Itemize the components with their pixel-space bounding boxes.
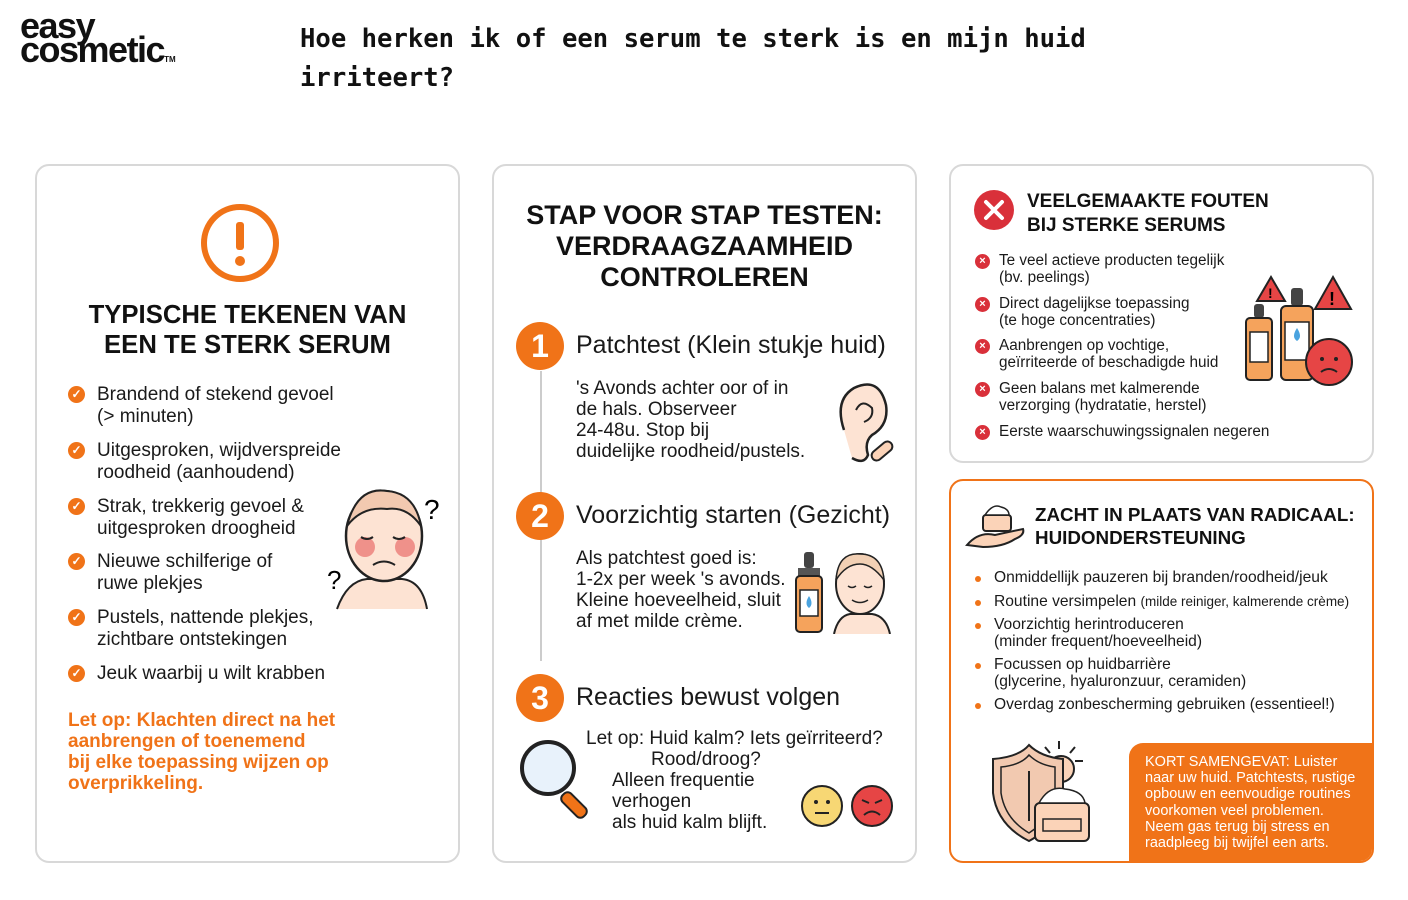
step 3: als huid kalm blijft.: [612, 812, 767, 833]
step 3: [516, 674, 893, 833]
step 2: 1-2x per week 's avonds.: [576, 569, 786, 590]
icon: emoji faces: [801, 785, 893, 827]
list: (te hoge concentraties): [999, 312, 1155, 329]
list: Routine versimpelen (milde reiniger, kalmerende crème): [994, 593, 1349, 610]
warning note: overprikkeling.: [68, 773, 203, 794]
list: [68, 384, 341, 684]
list: Overdag zonbescherming gebruiken (essentieel!): [994, 696, 1335, 713]
icon: irritated face: [327, 489, 440, 610]
list: (bv. peelings): [999, 269, 1090, 286]
logo: [20, 5, 176, 70]
summary callout: raadpleeg bij twijfel een arts.: [1145, 835, 1329, 851]
heading: VEELGEMAAKTE FOUTEN: [1027, 191, 1269, 212]
step 1: duidelijke roodheid/pustels.: [576, 441, 805, 462]
icon: bottles with warnings: !: [1268, 285, 1273, 301]
icon: red X: [974, 190, 1014, 230]
icon: hand with cream: [965, 505, 1024, 548]
heading: ZACHT IN PLAATS VAN RADICAAL:: [1035, 504, 1355, 525]
list: Voorzichtig herintroduceren: [994, 616, 1184, 633]
step 1: de hals. Observeer: [576, 399, 737, 420]
icon: ear: [839, 383, 894, 462]
panel: typical signs: [35, 164, 460, 863]
list: Strak, trekkerig gevoel &: [97, 496, 304, 517]
step 1: [516, 322, 894, 462]
list: Nieuwe schilferige of: [97, 551, 272, 572]
step 2: 2: [531, 498, 549, 534]
heading: TYPISCHE TEKENEN VAN: [89, 301, 406, 329]
step 3: Rood/droog?: [651, 749, 761, 770]
list: Eerste waarschuwingssignalen negeren: [999, 423, 1269, 440]
step 2: af met milde crème.: [576, 611, 743, 632]
step 3: Alleen frequentie: [612, 770, 755, 791]
list: Uitgesproken, wijdverspreide: [97, 440, 341, 461]
list: Onmiddellijk pauzeren bij branden/roodheid/jeuk: [994, 569, 1328, 586]
list: ruwe plekjes: [97, 573, 203, 594]
heading: [1027, 191, 1269, 236]
heading: [88, 301, 406, 359]
list: (glycerine, hyaluronzuur, ceramiden): [994, 673, 1246, 690]
title: [300, 24, 1086, 93]
list: Te veel actieve producten tegelijk: [999, 252, 1224, 269]
heading: [526, 200, 883, 292]
list: verzorging (hydratatie, herstel): [999, 397, 1206, 414]
icon: magnifier: [520, 740, 588, 819]
summary callout: KORT SAMENGEVAT: Luister: [1145, 754, 1337, 770]
step 1: Patchtest (Klein stukje huid): [576, 331, 886, 359]
warning note: [68, 710, 335, 794]
panel: common mistakes: [949, 164, 1374, 463]
step 2: Kleine hoeveelheid, sluit: [576, 590, 781, 611]
warning note: aanbrengen of toenemend: [68, 731, 306, 752]
summary callout: opbouw en eenvoudige routines: [1145, 786, 1351, 802]
panel: common mistakes: ×: [979, 383, 986, 395]
panel: gentle support: [949, 479, 1374, 863]
summary callout: Neem gas terug bij stress en: [1145, 819, 1330, 835]
list: zichtbare ontstekingen: [97, 629, 287, 650]
panel: common mistakes: ×: [979, 298, 986, 310]
list: uitgesproken droogheid: [97, 518, 296, 539]
panel: common mistakes: ×: [979, 255, 986, 267]
icon: bottles with warnings: [1245, 275, 1353, 386]
heading: CONTROLEREN: [600, 262, 809, 292]
summary callout: [1129, 743, 1379, 873]
list: Focussen op huidbarrière: [994, 656, 1171, 673]
icon: irritated face: ?: [424, 494, 440, 525]
icon: exclamation: [201, 204, 279, 282]
list: [975, 252, 1269, 440]
panel: typical signs: ✓: [71, 499, 82, 513]
step 3: 3: [531, 680, 549, 716]
heading: VERDRAAGZAAMHEID: [556, 231, 853, 261]
warning note: bij elke toepassing wijzen op: [68, 752, 329, 773]
panel: typical signs: ✓: [71, 443, 82, 457]
panel: common mistakes: ×: [979, 340, 986, 352]
list: Brandend of stekend gevoel: [97, 384, 334, 405]
icon: shield sun cream: [992, 741, 1090, 842]
list: Geen balans met kalmerende: [999, 380, 1200, 397]
step 3: verhogen: [612, 791, 691, 812]
panel: typical signs: ✓: [71, 387, 82, 401]
warning note: Let op: Klachten direct na het: [68, 710, 335, 731]
logo: easy: [20, 5, 94, 46]
panel: common mistakes: ×: [979, 426, 986, 438]
heading: BIJ STERKE SERUMS: [1027, 215, 1225, 236]
panel: typical signs: ✓: [71, 666, 82, 680]
title: irriteert?: [300, 63, 454, 93]
heading: HUIDONDERSTEUNING: [1035, 527, 1246, 548]
list: Aanbrengen op vochtige,: [999, 337, 1169, 354]
step 3: Let op: Huid kalm? Iets geïrriteerd?: [586, 728, 883, 749]
list: (minder frequent/hoeveelheid): [994, 633, 1202, 650]
heading: EEN TE STERK SERUM: [104, 331, 391, 359]
summary callout: naar uw huid. Patchtests, rustige: [1145, 770, 1355, 786]
list: [975, 569, 1349, 713]
step 1: 1: [531, 328, 549, 364]
connector line: [540, 371, 542, 661]
panel: step by step: [492, 164, 917, 863]
title: Hoe herken ik of een serum te sterk is en mijn huid: [300, 24, 1086, 54]
step 3: Reacties bewust volgen: [576, 683, 840, 711]
icon: bottles with warnings: !: [1329, 289, 1335, 309]
list: geïrriteerde of beschadigde huid: [999, 354, 1218, 371]
logo: cosmeticTM: [20, 29, 176, 70]
step 2: Als patchtest goed is:: [576, 548, 757, 569]
icon: serum bottle and face: [795, 552, 891, 634]
summary callout: voorkomen veel problemen.: [1145, 803, 1324, 819]
icon: irritated face: ?: [327, 565, 341, 595]
heading: [1035, 504, 1355, 548]
heading: STAP VOOR STAP TESTEN:: [526, 200, 883, 230]
panel: typical signs: ✓: [71, 554, 82, 568]
list: Direct dagelijkse toepassing: [999, 295, 1189, 312]
list: Pustels, nattende plekjes,: [97, 607, 314, 628]
step 2: [516, 492, 891, 634]
list: (> minuten): [97, 406, 194, 427]
step 2: Voorzichtig starten (Gezicht): [576, 501, 890, 529]
step 1: 's Avonds achter oor of in: [576, 378, 788, 399]
panel: typical signs: ✓: [71, 610, 82, 624]
step 1: 24-48u. Stop bij: [576, 420, 709, 441]
list: Jeuk waarbij u wilt krabben: [97, 663, 325, 684]
list: roodheid (aanhoudend): [97, 462, 295, 483]
